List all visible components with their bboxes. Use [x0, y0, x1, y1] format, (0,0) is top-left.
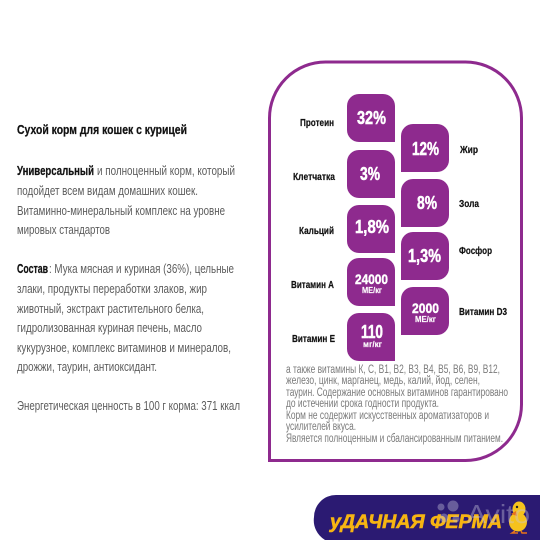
- paragraph: composition: : Мука мясная и куриная (36%), цельные: [49, 261, 234, 276]
- label: calcium: Кальций: [299, 225, 334, 237]
- paragraph: composition: дрожжи, таурин, антиоксидант.: [17, 359, 157, 374]
- tile: vitamin D3: МЕ/кг: [415, 315, 437, 324]
- label: phosphorus: Фосфор: [459, 245, 492, 257]
- paragraph: composition: злаки, продукты переработки злаков, жир: [17, 281, 207, 296]
- panel: nutrition facts: [270, 62, 522, 460]
- paragraph: universal food: [17, 163, 235, 237]
- tile: fiber: [347, 150, 395, 198]
- tile: phosphorus: [401, 232, 449, 280]
- brand name: уДАЧНАЯ ФЕРМА: [329, 512, 502, 533]
- tile: protein: 32%: [357, 108, 386, 128]
- label: vitamin A: Витамин А: [291, 279, 334, 291]
- paragraph: universal food: Универсальный: [17, 163, 94, 178]
- watermark: Avito: Avito: [467, 499, 530, 529]
- tile: calcium: 1,8%: [355, 217, 389, 237]
- paragraph: universal food: Витаминно-минеральный комплекс на уровне: [17, 203, 225, 218]
- paragraph: composition: [17, 261, 234, 374]
- banner background: [314, 495, 540, 540]
- tile: ash: [401, 179, 449, 227]
- paragraph: universal food: мировых стандартов: [17, 222, 110, 237]
- tile: fat: 12%: [412, 139, 439, 159]
- paragraph: composition: Состав: [17, 261, 48, 276]
- tile: vitamin D3: [401, 287, 449, 335]
- label: ash: Зола: [459, 198, 479, 210]
- text block: additional vitamins: [286, 364, 508, 445]
- banner: brand logo: [314, 495, 540, 540]
- icon: chick mascot: [509, 502, 527, 533]
- paragraph: composition: кукурузное, комплекс витаминов и минералов,: [17, 340, 231, 355]
- label: protein: Протеин: [300, 117, 334, 129]
- label: fiber: Клетчатка: [293, 171, 335, 183]
- label: fat: Жир: [459, 144, 478, 156]
- paragraph: composition: животный, экстракт растительного белка,: [17, 301, 204, 316]
- tile: vitamin E: мг/кг: [363, 340, 383, 349]
- paragraph: energy value: Энергетическая ценность в 100 г корма: 371 ккал: [17, 398, 240, 413]
- watermark: Avito: [438, 499, 530, 529]
- tile: ash: 8%: [417, 193, 437, 213]
- tile: protein: [347, 94, 395, 142]
- panel outline: [270, 62, 522, 460]
- text block: product description: [17, 122, 240, 413]
- tile: fat: [401, 124, 449, 172]
- tile: fiber: 3%: [360, 164, 380, 184]
- tile: vitamin A: [347, 258, 395, 306]
- tile: vitamin A: МЕ/кг: [362, 286, 383, 295]
- paragraph: universal food: и полноценный корм, который: [97, 163, 235, 178]
- text block: additional vitamins: до истечении срока годности продукта.: [286, 398, 439, 410]
- tile: phosphorus: 1,3%: [408, 246, 441, 266]
- tile: vitamin E: 110: [361, 322, 383, 342]
- label: vitamin E: Витамин Е: [292, 333, 335, 345]
- tile: calcium: [347, 205, 395, 253]
- tile: vitamin A: 24000: [355, 272, 388, 287]
- label: vitamin D3: Витамин D3: [459, 306, 507, 318]
- heading: product title: Сухой корм для кошек с курицей: [17, 122, 187, 137]
- text block: additional vitamins: усилителей вкуса.: [286, 421, 356, 433]
- tile: vitamin E: [347, 313, 395, 361]
- paragraph: composition: гидролизованная куриная печень, масло: [17, 320, 202, 335]
- tile: vitamin D3: 2000: [412, 301, 439, 316]
- paragraph: universal food: подойдет всем видам домашних кошек.: [17, 183, 198, 198]
